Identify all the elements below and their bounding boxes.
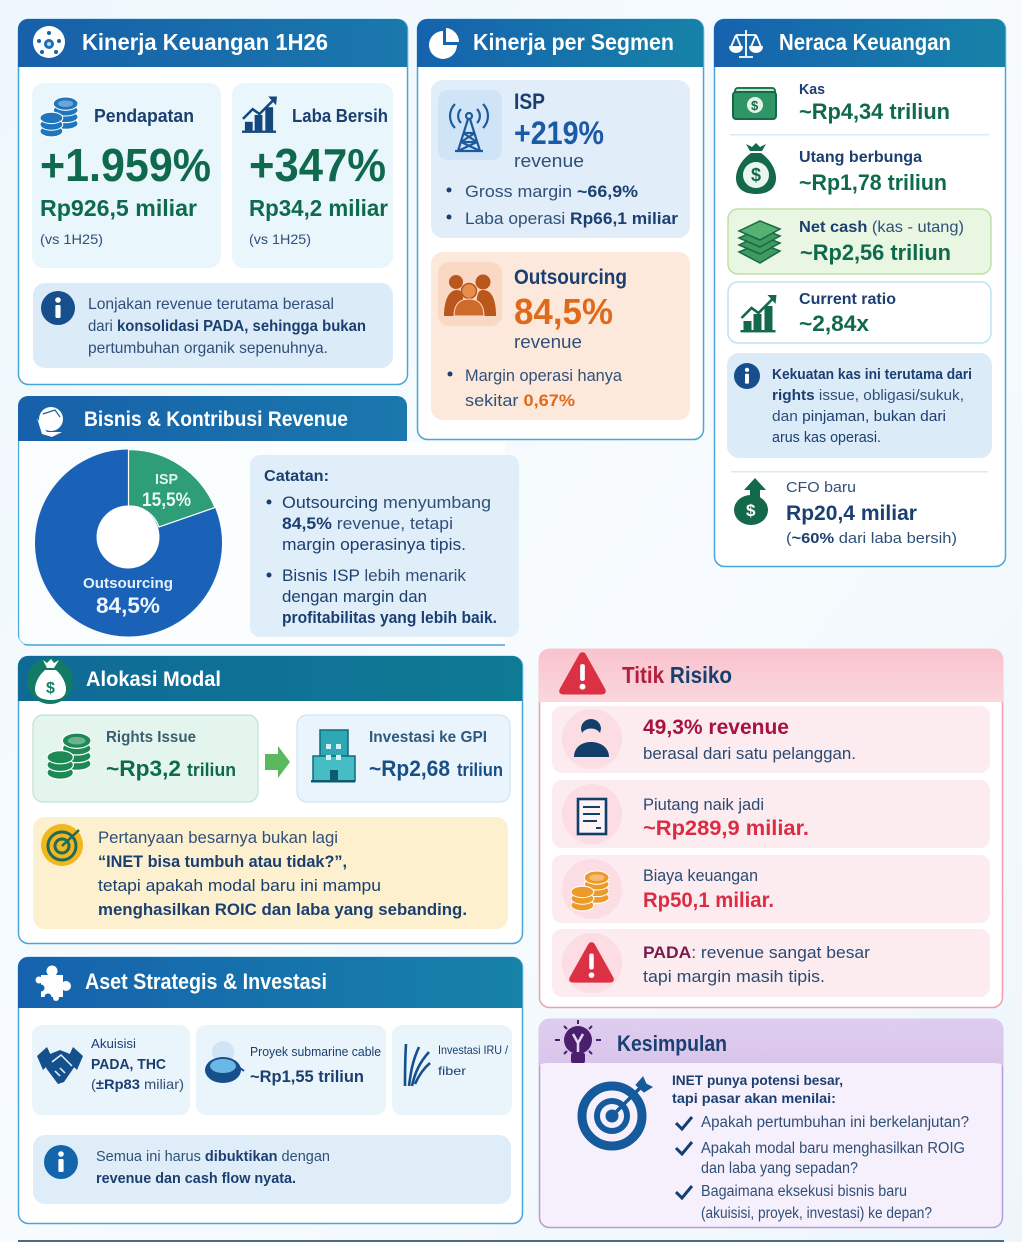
icon: cash stack [739, 221, 780, 263]
icon: rising chart [242, 97, 277, 133]
card: Outsourcing: sekitar 0,67% [465, 391, 575, 410]
card: Catatan: Outsourcing menyumbang [282, 493, 491, 512]
icon: money bag [736, 143, 776, 194]
item: CFO baru: $ [746, 501, 756, 520]
callout: kekuatan kas: Kekuatan kas ini terutama dari [772, 367, 972, 383]
card: Akuisisi: Akuisisi [91, 1036, 136, 1051]
text: kesimpulan: tapi pasar akan menilai: [672, 1090, 836, 1106]
icon: bulb [555, 1020, 601, 1063]
row: piutang: ~Rp289,9 miliar. [643, 817, 809, 840]
card: ISP: Gross margin ~66,9% [465, 182, 638, 201]
callout: pertanyaan [33, 817, 508, 929]
row: biaya keuangan [552, 855, 990, 923]
card: ISP: revenue [514, 151, 584, 171]
row: piutang [552, 780, 990, 848]
icon: fiber [405, 1044, 430, 1086]
card: Net cash [728, 209, 991, 274]
icon: target [41, 824, 83, 866]
card: Outsourcing: 84,5% [514, 291, 613, 332]
callout: info: Semua ini harus dibuktikan dengan [96, 1148, 330, 1165]
icon: check [676, 1142, 692, 1154]
callout: info: pertumbuhan organik sepenuhnya. [88, 340, 328, 357]
callout: pertanyaan: tetapi apakah modal baru ini mampu [98, 876, 381, 895]
panel: Aset Strategis & Investasi [18, 957, 522, 1224]
text: kesimpulan: Bagaimana eksekusi bisnis baru [701, 1183, 907, 1200]
row: piutang: Piutang naik jadi [643, 796, 764, 814]
icon: person [574, 719, 609, 757]
card: Investasi ke GPI [297, 715, 510, 802]
card: Investasi IRU / fiber: fiber [438, 1064, 466, 1078]
card: ISP: +219% [514, 115, 604, 151]
panel: Bisnis & Kontribusi Revenue [18, 396, 519, 645]
icon: coins [571, 871, 609, 911]
card: Laba Bersih: +347% [249, 139, 386, 191]
icon: coins [40, 97, 78, 137]
icon: rising chart [740, 295, 776, 332]
card: Catatan: Catatan: [264, 468, 329, 485]
icon: document [578, 799, 606, 834]
card: Catatan [250, 455, 519, 637]
icon: warning [569, 942, 614, 983]
icon: warning [559, 652, 606, 695]
item: CFO baru: CFO baru [786, 479, 856, 496]
row: PADA: PADA: revenue sangat besar [643, 943, 870, 962]
callout: kekuatan kas: rights issue, obligasi/sukuk, [772, 388, 964, 404]
card: Rights Issue: ~Rp3,2 [106, 756, 181, 781]
card: Laba Bersih [232, 83, 393, 268]
item: CFO baru: (~60% dari laba bersih) [786, 530, 957, 547]
card: Proyek submarine cable [196, 1025, 386, 1115]
donut chart: 15,5% [142, 490, 191, 511]
icon: check [676, 1186, 692, 1198]
item: Utang berbunga: Utang berbunga [799, 149, 922, 166]
card: Pendapatan [32, 83, 221, 268]
callout: kekuatan kas [727, 353, 992, 458]
icon: money up [734, 478, 768, 525]
heading: Aset Strategis & Investasi [85, 969, 327, 994]
card: Investasi IRU / fiber [392, 1025, 512, 1115]
donut chart: ISP [155, 471, 178, 488]
icon: handshake [37, 1047, 83, 1084]
panel: Kinerja Keuangan 1H26 [18, 19, 408, 384]
item: Utang berbunga: ~Rp1,78 triliun [799, 170, 947, 195]
icon: coins [47, 733, 91, 779]
text: kesimpulan: dan laba yang sepadan? [701, 1160, 858, 1177]
card: Investasi IRU / fiber: Investasi IRU / [438, 1043, 509, 1057]
panel: Neraca Keuangan [714, 19, 1006, 566]
text: kesimpulan: Apakah modal baru menghasilkan ROIG [701, 1140, 965, 1157]
card: Net cash: ~Rp2,56 triliun [800, 240, 951, 265]
card: Rights Issue: Rights Issue [106, 729, 196, 746]
card: Outsourcing: revenue [514, 332, 582, 352]
card: Akuisisi [32, 1025, 190, 1115]
row: pelanggan: berasal dari satu pelanggan. [643, 745, 856, 763]
icon: tower [438, 90, 502, 160]
card: Pendapatan: (vs 1H25) [40, 231, 103, 247]
callout: kekuatan kas: dan pinjaman, bukan dari [772, 409, 946, 425]
icon: check [676, 1117, 692, 1129]
panel: Kesimpulan [539, 1019, 1003, 1228]
icon: info [44, 1145, 78, 1179]
heading: Kesimpulan [617, 1031, 727, 1056]
item: Utang berbunga: $ [751, 165, 761, 185]
card: Rights Issue [33, 715, 258, 802]
callout: pertanyaan: menghasilkan ROIC dan laba yang sebanding. [98, 900, 467, 919]
heading: Alokasi Modal [86, 668, 221, 691]
row: pelanggan [552, 706, 990, 773]
heading: Bisnis & Kontribusi Revenue [84, 408, 348, 431]
card: Rights Issue: triliun [187, 760, 236, 780]
card: Akuisisi: (±Rp83 miliar) [91, 1076, 184, 1092]
heading: Titik Risiko [622, 662, 732, 688]
donut chart: 84,5% [96, 593, 160, 618]
callout: info [33, 283, 393, 368]
text: kesimpulan: INET punya potensi besar, [672, 1072, 843, 1088]
text: kesimpulan: Apakah pertumbuhan ini berkelanjutan? [701, 1114, 969, 1131]
icon: money bag: $ [46, 680, 55, 697]
heading: Neraca Keuangan [779, 29, 951, 55]
icon: pie [429, 28, 459, 59]
card: Catatan: dengan margin dan [282, 587, 427, 606]
icon: money bag [27, 658, 73, 704]
item: Utang berbunga [736, 143, 947, 195]
callout: kekuatan kas: arus kas operasi. [772, 430, 881, 446]
icon: banknote: $ [751, 98, 759, 113]
donut chart [35, 450, 222, 636]
icon: scales [730, 30, 762, 57]
icon: puzzle [36, 966, 71, 1001]
text: kesimpulan: (akuisisi, proyek, investasi) ke depan? [701, 1205, 932, 1222]
item: Kas: ~Rp4,34 triliun [799, 99, 950, 124]
card: Pendapatan: Pendapatan [94, 106, 194, 126]
card: Investasi ke GPI: triliun [457, 760, 503, 780]
text: kesimpulan [672, 1072, 969, 1222]
card: Laba Bersih: Rp34,2 miliar [249, 195, 388, 221]
card: Current ratio: ~2,84x [799, 311, 870, 336]
row: pelanggan: 49,3% revenue [643, 716, 789, 739]
card: Pendapatan: +1.959% [40, 139, 211, 191]
card: Investasi ke GPI: ~Rp2,68 [369, 756, 450, 781]
panel: Alokasi Modal [18, 656, 522, 944]
card: Catatan: 84,5% revenue, tetapi [282, 514, 453, 533]
card: Akuisisi: PADA, THC [91, 1056, 166, 1073]
item: Kas: Kas [799, 81, 825, 98]
card: Current ratio: Current ratio [799, 291, 896, 308]
card: Catatan: profitabilitas yang lebih baik. [282, 608, 497, 627]
icon: info [734, 363, 760, 389]
card: Laba Bersih: Laba Bersih [292, 106, 388, 126]
panel: Kinerja per Segmen [417, 19, 704, 440]
card: Catatan: Bisnis ISP lebih menarik [282, 566, 467, 585]
card: Net cash: Net cash (kas - utang) [799, 219, 964, 236]
row: biaya keuangan: Rp50,1 miliar. [643, 889, 774, 912]
item: Kas [733, 81, 950, 124]
callout: info: revenue dan cash flow nyata. [96, 1170, 296, 1187]
item: CFO baru [734, 478, 957, 547]
donut chart: Outsourcing [83, 575, 173, 592]
card: Proyek submarine cable: ~Rp1,55 triliun [250, 1067, 364, 1086]
arrow [265, 746, 290, 778]
icon: building [311, 730, 355, 782]
card: Pendapatan: Rp926,5 miliar [40, 195, 197, 221]
callout: info: Lonjakan revenue terutama berasal [88, 296, 334, 313]
icon: network [33, 26, 65, 58]
row: PADA [552, 929, 990, 997]
card: Current ratio [728, 282, 991, 343]
callout: info [33, 1135, 511, 1204]
item: CFO baru: Rp20,4 miliar [786, 502, 917, 525]
callout: pertanyaan: Pertanyaan besarnya bukan lagi [98, 828, 338, 847]
panel: Titik Risiko [539, 649, 1003, 1008]
card: Outsourcing: Outsourcing [514, 266, 627, 289]
icon: cable [205, 1041, 244, 1083]
icon: info [41, 291, 75, 325]
icon: target [582, 1077, 652, 1146]
card: Laba Bersih: (vs 1H25) [249, 231, 311, 247]
card: Proyek submarine cable: Proyek submarine cable [250, 1044, 381, 1059]
icon: banknote [733, 88, 776, 119]
row: biaya keuangan: Biaya keuangan [643, 867, 758, 885]
icon: people [438, 262, 502, 326]
icon: globe [37, 407, 63, 437]
card: Outsourcing [431, 252, 690, 420]
card: Outsourcing: Margin operasi hanya [465, 366, 623, 385]
heading: Kinerja per Segmen [473, 29, 674, 55]
row: PADA: tapi margin masih tipis. [643, 967, 825, 986]
card: ISP [431, 80, 690, 238]
heading: Kinerja Keuangan 1H26 [82, 29, 328, 55]
card: Investasi ke GPI: Investasi ke GPI [369, 729, 487, 746]
callout: pertanyaan: “INET bisa tumbuh atau tidak?”, [98, 852, 347, 871]
card: ISP: ISP [514, 89, 545, 114]
callout: info: dari konsolidasi PADA, sehingga bukan [88, 318, 366, 335]
card: ISP: Laba operasi Rp66,1 miliar [465, 209, 678, 228]
card: Catatan: margin operasinya tipis. [282, 535, 466, 554]
